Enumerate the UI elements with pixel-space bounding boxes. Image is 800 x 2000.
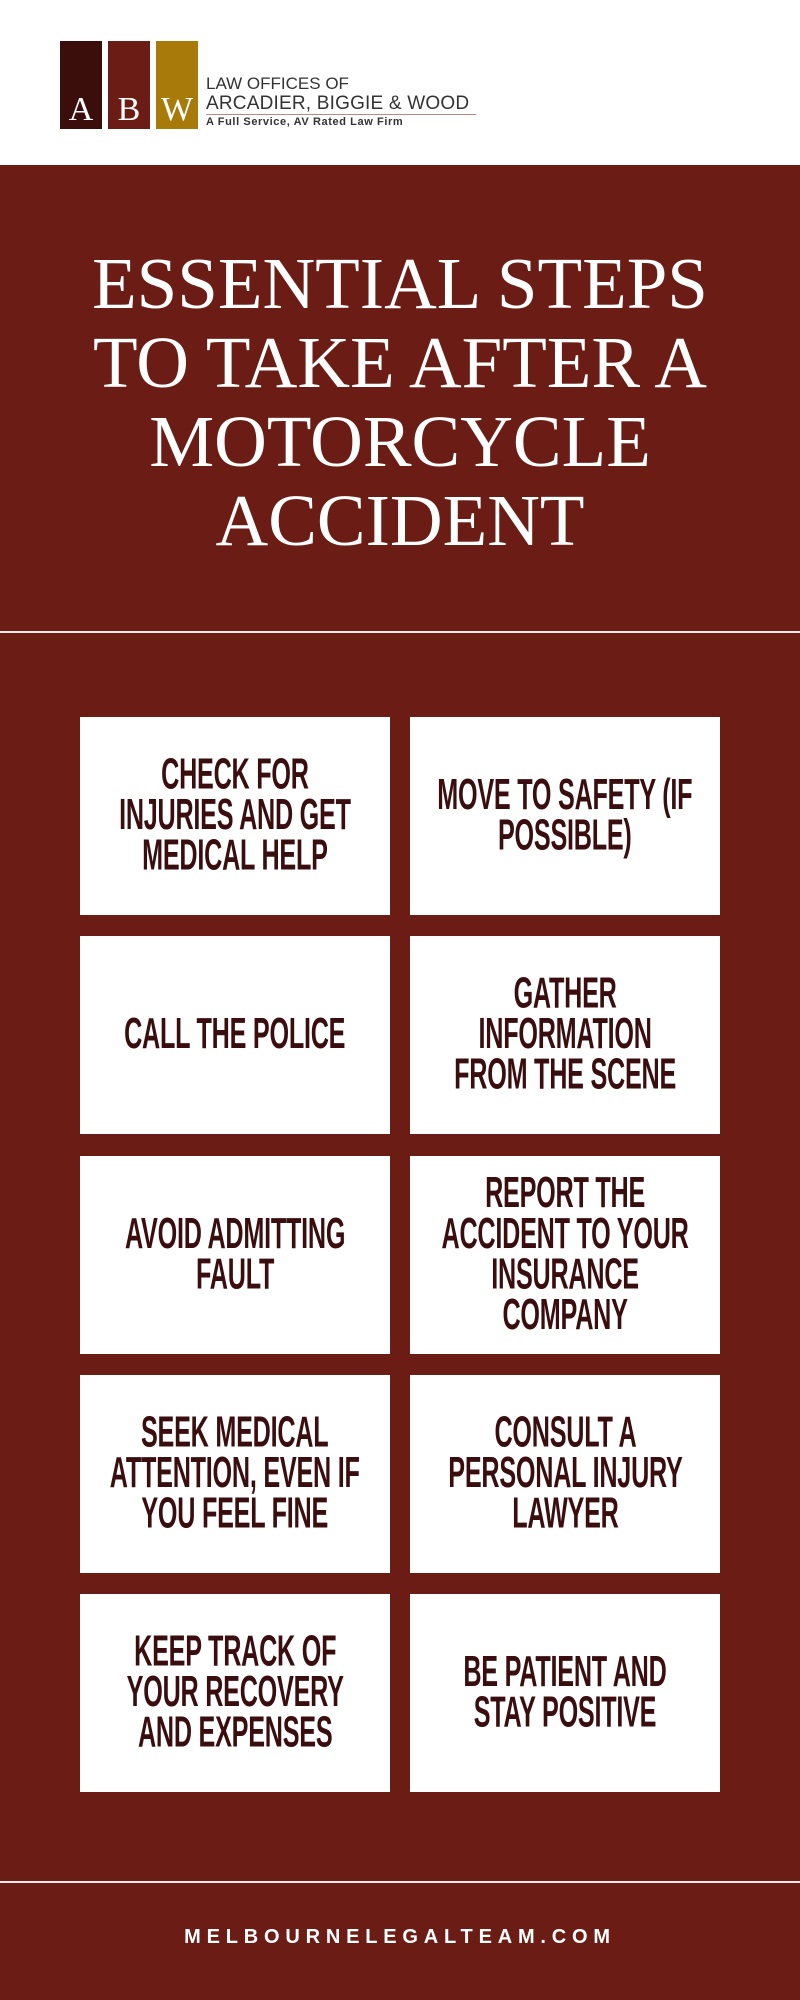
- step 4: [410, 936, 720, 1134]
- step 6: COMPANY: [502, 1291, 628, 1339]
- step 4: GATHER: [513, 970, 617, 1018]
- logo text: LAW OFFICES OF: [206, 74, 349, 93]
- step 10: BE PATIENT AND: [463, 1648, 667, 1696]
- step 6: INSURANCE: [491, 1251, 639, 1298]
- step 9: YOUR RECOVERY: [126, 1668, 344, 1716]
- logo text: A Full Service, AV Rated Law Firm: [206, 116, 403, 128]
- step 1: INJURIES AND GET: [119, 791, 351, 839]
- step 5: FAULT: [196, 1251, 274, 1298]
- step 2: POSSIBLE): [498, 812, 632, 860]
- step 1: MEDICAL HELP: [142, 832, 328, 880]
- title: ESSENTIAL STEPS: [92, 243, 708, 324]
- step 7: SEEK MEDICAL: [141, 1409, 329, 1457]
- step 8: [410, 1375, 720, 1573]
- step 10: [410, 1594, 720, 1792]
- title: MOTORCYCLE: [149, 401, 651, 482]
- step 4: INFORMATION: [478, 1010, 652, 1058]
- step 9: AND EXPENSES: [138, 1709, 332, 1757]
- step 7: YOU FEEL FINE: [142, 1490, 328, 1538]
- step 2: [410, 717, 720, 915]
- step 2: MOVE TO SAFETY (IF: [438, 771, 692, 819]
- logo bars: [60, 41, 198, 129]
- step 1: [80, 717, 390, 915]
- logo bars: A: [69, 91, 93, 128]
- logo bars: B: [118, 91, 140, 128]
- step 9: KEEP TRACK OF: [134, 1628, 336, 1676]
- title: [92, 243, 708, 561]
- step 3: [80, 936, 390, 1134]
- step 9: [80, 1594, 390, 1792]
- title: ACCIDENT: [215, 480, 585, 561]
- step 7: [80, 1375, 390, 1573]
- logo bars: W: [161, 91, 193, 128]
- header: logo area: [0, 0, 800, 165]
- step 6: ACCIDENT TO YOUR: [441, 1210, 689, 1258]
- step 8: LAWYER: [512, 1490, 618, 1538]
- logo text: ARCADIER, BIGGIE & WOOD: [206, 93, 469, 114]
- step 5: [80, 1156, 390, 1354]
- step 4: FROM THE SCENE: [454, 1051, 676, 1099]
- step 6: REPORT THE: [485, 1169, 645, 1217]
- title: TO TAKE AFTER A: [93, 322, 707, 403]
- step 10: STAY POSITIVE: [474, 1689, 656, 1736]
- step 8: CONSULT A: [494, 1409, 636, 1457]
- logo text: [206, 74, 476, 128]
- step 7: ATTENTION, EVEN IF: [110, 1449, 360, 1497]
- step 1: CHECK FOR: [161, 751, 309, 799]
- footer url: MELBOURNELEGALTEAM.COM: [184, 1926, 616, 1948]
- step 5: AVOID ADMITTING: [125, 1210, 345, 1258]
- step 3: CALL THE POLICE: [124, 1010, 346, 1058]
- step 8: PERSONAL INJURY: [448, 1449, 682, 1497]
- step 6: [410, 1156, 720, 1354]
